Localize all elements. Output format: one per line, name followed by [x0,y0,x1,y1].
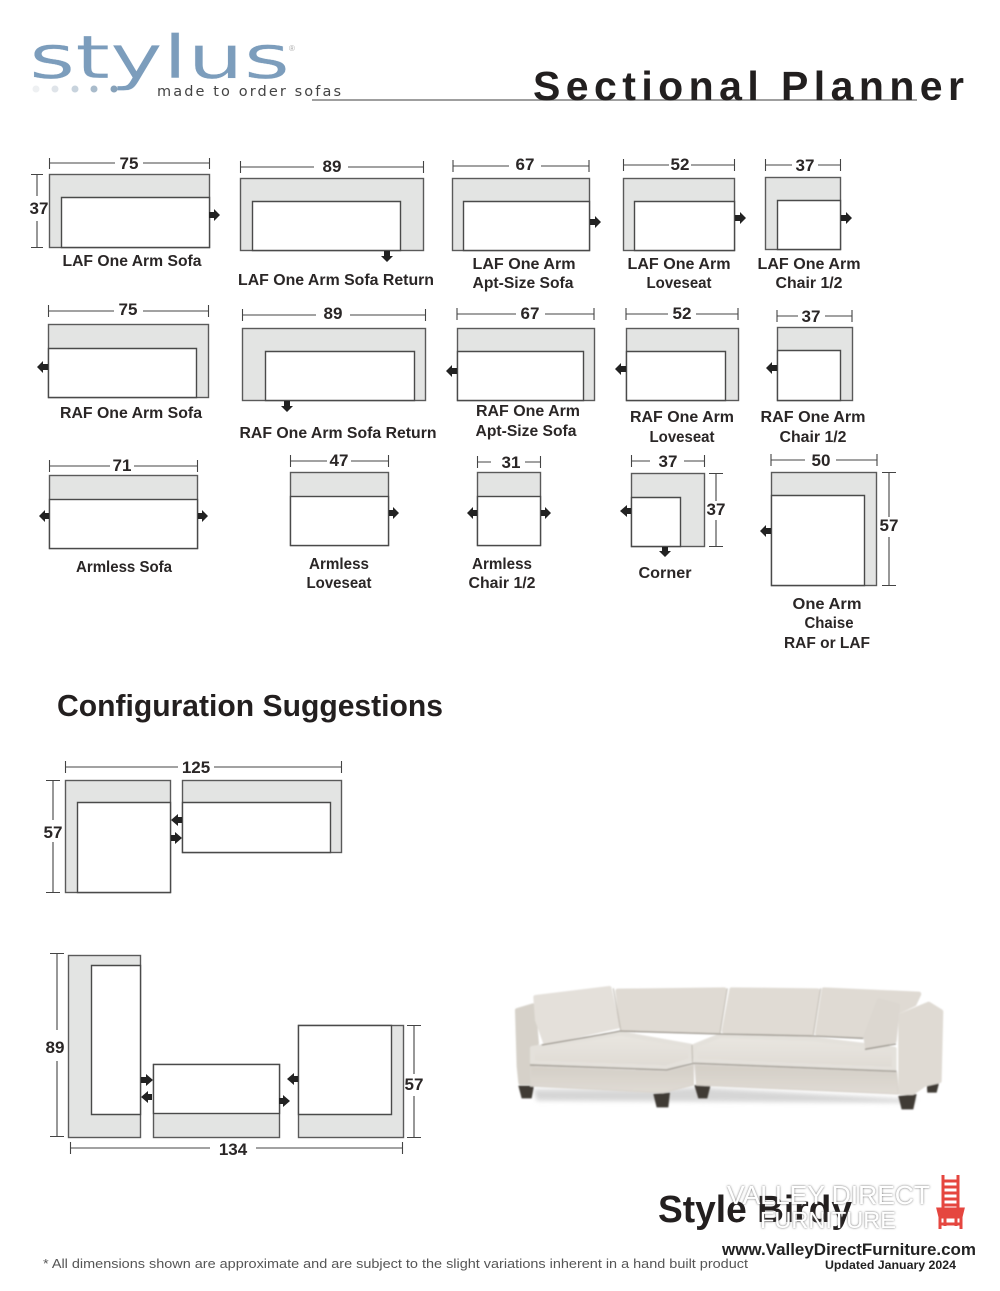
sofa photo [517,988,941,1109]
piece: RAF One Arm Sofa [37,300,208,422]
piece: LAF One Arm Sofa Return: 89 [323,157,341,176]
piece: Corner: 37 [659,452,677,471]
configuration 2: 134 wide, 89 deep: 57 [405,1075,423,1094]
piece: RAF One Arm Sofa Return: 89 [324,304,342,323]
piece: Armless Loveseat: Armless [309,556,369,573]
piece: LAF One Arm Sofa: 75 [120,154,138,173]
configuration 2: 134 wide, 89 deep: 134 [219,1140,248,1159]
piece: Armless Sofa: 71 [113,456,131,475]
piece: RAF One Arm Loveseat [615,304,738,446]
piece: One Arm Chaise RAF or LAF [760,451,898,652]
watermark: Valley Direct Furniture: VALLEY DIRECT [727,1180,930,1210]
piece: RAF One Arm Chair 1/2: Chair 1/2 [780,429,847,446]
piece: LAF One Arm Sofa: LAF One Arm Sofa [62,253,202,270]
piece: RAF One Arm Apt-Size Sofa: Apt-Size Sofa [476,423,577,440]
website URL: www.ValleyDirectFurniture.com [721,1241,976,1259]
piece: RAF One Arm Sofa Return [240,304,436,442]
icon: red chair [938,1175,963,1229]
piece: LAF One Arm Sofa [30,154,220,270]
configuration 2: 134 wide, 89 deep: 89 [46,1038,64,1057]
configuration 1: 125 wide: 57 [44,823,62,842]
logo: stylus [29,23,341,100]
piece: Armless Loveseat: Loveseat [306,575,372,592]
piece: RAF One Arm Loveseat: RAF One Arm [630,409,734,426]
piece: Corner [620,452,725,582]
logo: stylus: ® [289,44,295,53]
piece: One Arm Chaise RAF or LAF: Chaise [804,615,854,632]
footnote: * All dimensions shown are approximate and are subject to the slight variations inherent in a hand built product [43,1256,748,1271]
piece: LAF One Arm Loveseat: Loveseat [646,275,712,292]
watermark: Valley Direct Furniture: FURNITURE [760,1207,896,1233]
watermark: Valley Direct Furniture [727,1180,930,1233]
heading: Configuration Suggestions: Configuration Suggestions [57,688,443,723]
logo: stylus: made to order sofas [157,84,341,100]
title rule [312,99,917,101]
piece: LAF One Arm Chair 1/2 [758,156,860,292]
logo: stylus: stylus [29,23,290,93]
piece: LAF One Arm Sofa Return [238,157,434,289]
piece: LAF One Arm Chair 1/2: 37 [796,156,814,175]
piece: RAF One Arm Loveseat: 52 [673,304,691,323]
piece: RAF One Arm Apt-Size Sofa [446,304,594,440]
style name: Style Birdy: Style Birdy [658,1189,852,1231]
piece: Corner: Corner [638,565,692,582]
piece: One Arm Chaise RAF or LAF: 50 [812,451,830,470]
piece: LAF One Arm Apt-Size Sofa: LAF One Arm [472,256,576,273]
piece: One Arm Chaise RAF or LAF: One Arm [792,596,862,613]
piece: One Arm Chaise RAF or LAF: 57 [880,516,898,535]
piece: Armless Loveseat [290,451,399,592]
title: Sectional Planner: Sectional Planner [533,63,964,109]
piece: RAF One Arm Apt-Size Sofa: 67 [521,304,539,323]
piece: Armless Chair 1/2: Chair 1/2 [468,575,536,592]
piece: LAF One Arm Sofa Return: LAF One Arm Sofa Return [238,272,434,289]
piece: LAF One Arm Apt-Size Sofa: Apt-Size Sofa [472,275,574,292]
piece: RAF One Arm Apt-Size Sofa: RAF One Arm [476,403,580,420]
piece: Corner: 37 [707,500,725,519]
piece: Armless Chair 1/2: 31 [502,453,520,472]
piece: RAF One Arm Sofa: 75 [119,300,137,319]
piece: LAF One Arm Loveseat [624,155,746,292]
piece: LAF One Arm Loveseat: 52 [671,155,689,174]
piece: RAF One Arm Chair 1/2: RAF One Arm [760,409,866,426]
piece: RAF One Arm Chair 1/2 [760,307,866,446]
configuration 1: 125 wide: 125 [182,758,210,777]
piece: RAF One Arm Loveseat: Loveseat [650,429,715,446]
piece: LAF One Arm Sofa: 37 [30,199,48,218]
piece: LAF One Arm Apt-Size Sofa [452,155,601,292]
piece: Armless Chair 1/2 [467,453,551,592]
piece: RAF One Arm Sofa: RAF One Arm Sofa [60,405,202,422]
piece: Armless Chair 1/2: Armless [472,556,532,573]
piece: One Arm Chaise RAF or LAF: RAF or LAF [784,635,870,652]
piece: LAF One Arm Chair 1/2: Chair 1/2 [776,275,843,292]
piece: Armless Sofa: Armless Sofa [76,559,172,576]
piece: LAF One Arm Chair 1/2: LAF One Arm [758,256,860,273]
update date: Updated January 2024 [825,1258,956,1272]
piece: RAF One Arm Sofa Return: RAF One Arm Sofa Return [240,425,436,442]
configuration 2: 134 wide, 89 deep [46,954,423,1159]
piece: RAF One Arm Chair 1/2: 37 [802,307,820,326]
piece: LAF One Arm Apt-Size Sofa: 67 [516,155,534,174]
piece: LAF One Arm Loveseat: LAF One Arm [628,256,730,273]
piece: Armless Loveseat: 47 [330,451,348,470]
configuration 1: 125 wide [44,758,342,892]
piece: Armless Sofa [39,456,208,576]
